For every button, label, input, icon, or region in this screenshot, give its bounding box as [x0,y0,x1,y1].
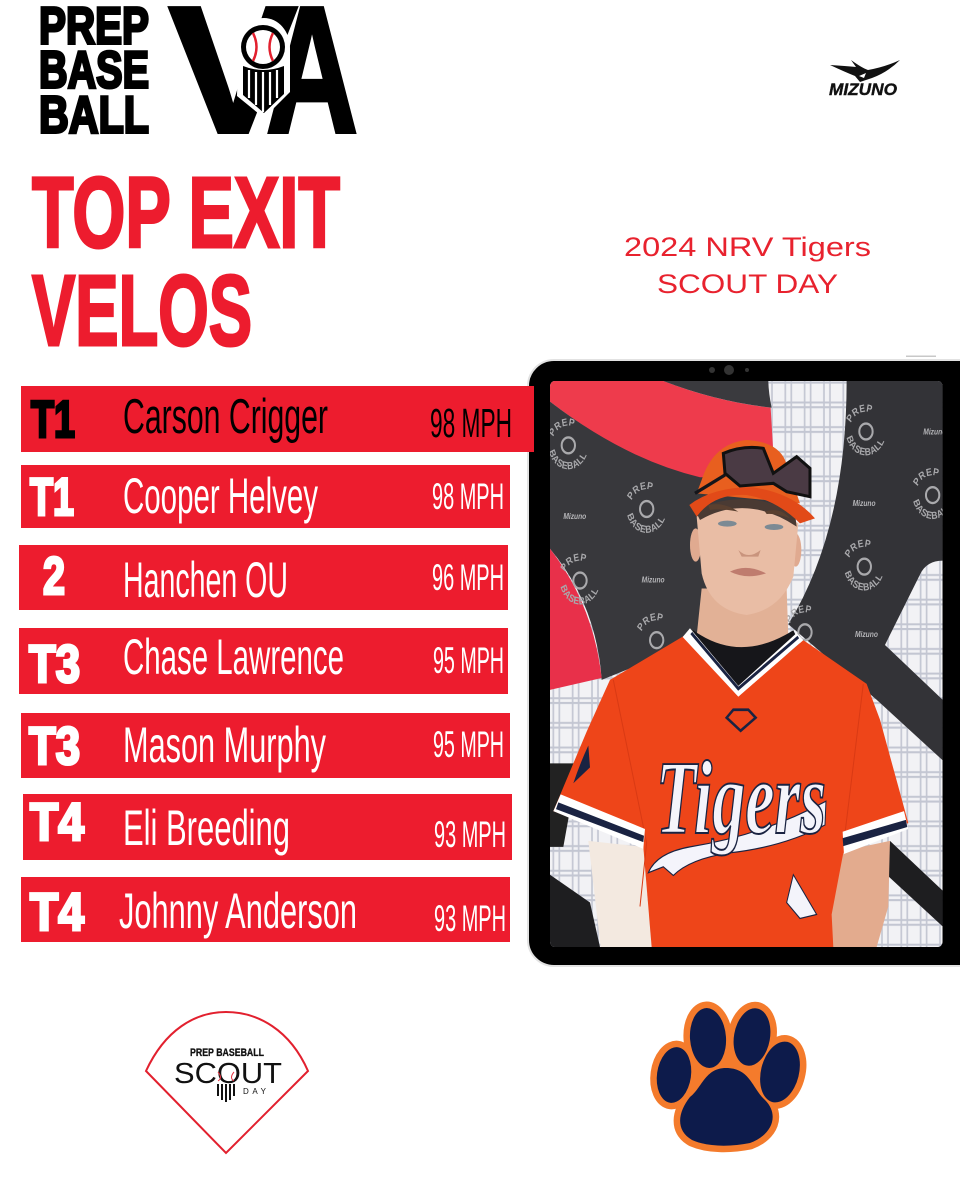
row: Johnny Anderson [21,877,510,942]
row: Cooper Helvey: T1 [30,468,74,527]
player photo: Mizuno [642,575,665,585]
backdrop logos: PREP [788,605,812,623]
title [32,157,340,367]
paw navy pads [653,1005,806,1146]
logo wordmark: Prep Baseball: BALL [39,86,149,144]
backdrop logos [550,404,943,686]
row: Carson Crigger [21,386,534,452]
row: Cooper Helvey [21,465,510,528]
player head and cap [689,440,815,615]
row: Carson Crigger: 98 MPH [430,400,512,446]
backdrop logos: BASEBALL [560,584,598,605]
jersey number [787,875,817,918]
row: Hanchen OU: 96 MPH [432,557,504,598]
event subtitle: 2024 NRV Tigers [624,232,871,262]
logo: Prep Baseball Scout Day: PREP BASEBALL [190,1047,264,1059]
logo wordmark: Prep Baseball [39,0,149,144]
backdrop logos: PREP [913,468,939,486]
jersey sleeve cuffs [553,794,645,849]
row: Mason Murphy: T3 [29,717,80,776]
row: Hanchen OU: Hanchen OU [123,552,288,608]
backdrop logos: PREP [627,482,653,500]
row: Hanchen OU: 2 [43,547,65,606]
logo letters: VA [169,0,358,171]
backdrop logos: BASEBALL [627,512,665,533]
row: Chase Lawrence: Chase Lawrence [123,629,344,685]
row: Cooper Helvey: 98 MPH [432,476,504,517]
event subtitle [624,232,871,299]
jersey script [647,759,826,876]
backdrop logos: BASEBALL [846,435,884,456]
leaderboard rows [19,386,534,942]
backdrop logos: PREP [844,540,870,558]
row: Hanchen OU [19,545,508,610]
backdrop logos: PREP [846,404,872,422]
jersey script: Tigers [656,740,826,857]
sleeve paw [573,746,590,783]
logo: Mizuno: MIZUNO [829,80,897,99]
player photo: Mizuno [563,511,587,521]
row: Chase Lawrence: 95 MPH [433,640,504,681]
logo: Prep Baseball VA [39,0,358,171]
row: Mason Murphy [21,713,510,778]
logo icon: baseball shield [237,18,290,118]
right arm [832,840,890,947]
event subtitle: SCOUT DAY [657,269,838,299]
left arm sleeve [588,841,652,947]
jersey [553,636,908,947]
logo: tigers paw [653,1005,806,1146]
backdrop logos: PREP [637,613,663,631]
row: Chase Lawrence [19,628,508,694]
backdrop logos: BASEBALL [550,449,587,470]
row: Mason Murphy: Mason Murphy [123,717,326,773]
row: Johnny Anderson: Johnny Anderson [119,883,357,939]
row: Eli Breeding: 93 MPH [434,814,506,855]
neck [697,588,788,648]
row: Johnny Anderson: 93 MPH [434,898,506,939]
row: Chase Lawrence: T3 [29,635,80,694]
logo: Prep Baseball Scout Day: SCOUT [174,1058,282,1090]
logo: Prep Baseball Scout Day [146,1012,308,1153]
row: Carson Crigger: Carson Crigger [123,390,328,444]
logo: Prep Baseball Scout Day: DAY [243,1087,267,1096]
logo: Mizuno [829,60,900,99]
row: Eli Breeding: Eli Breeding [123,800,290,856]
player photo: Mizuno [855,629,878,639]
row: Johnny Anderson: T4 [30,883,84,942]
player photo [550,381,943,947]
row: Mason Murphy: 95 MPH [433,724,504,765]
backdrop logos: PREP [550,418,574,436]
backdrop logos: PREP [560,554,586,572]
chest logo [727,710,756,731]
player photo: Mizuno [853,498,876,508]
backdrop logos: BASEBALL [844,570,882,591]
player photo: Mizuno [923,427,947,436]
backdrop logos: BASEBALL [913,498,943,520]
title: VELOS [32,255,252,367]
logo wordmark: Prep Baseball: BASE [39,42,149,100]
row: Eli Breeding: T4 [30,793,84,852]
row: Cooper Helvey: Cooper Helvey [123,468,318,524]
title: TOP EXIT [32,157,340,269]
tablet frame with player photo [527,356,960,967]
jersey collar [683,628,803,697]
row: Eli Breeding [23,793,512,860]
paw orange outline [653,1005,806,1146]
row: Carson Crigger: T1 [31,391,75,449]
